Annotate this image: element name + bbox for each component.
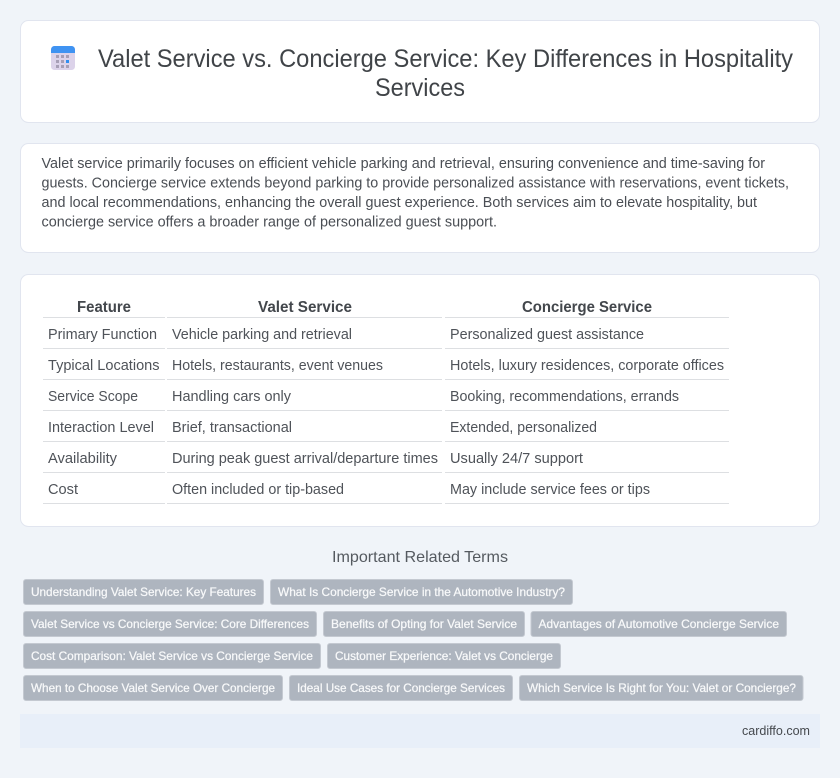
panel: related term tags <box>24 580 803 700</box>
panel: introduction text: concierge service offers a broader range of personalized guest support. <box>42 214 497 230</box>
title <box>98 45 793 102</box>
footer <box>20 714 820 748</box>
tag row 4: Ideal Use Cases for Concierge Services <box>297 681 505 695</box>
panel: header <box>20 20 820 122</box>
row: interaction level <box>43 420 729 442</box>
row: typical locations: Hotels, restaurants, event venues <box>172 358 383 374</box>
tag row 4: When to Choose Valet Service Over Concierge <box>31 681 275 695</box>
tag row 2: Advantages of Automotive Concierge Service <box>538 617 779 631</box>
tag row 1: What Is Concierge Service in the Automotive Industry? <box>278 585 565 599</box>
row: cost: Often included or tip-based <box>172 482 344 498</box>
row: interaction level: Interaction Level <box>48 420 154 436</box>
heading: important related terms: Important Related Terms <box>332 549 508 566</box>
title: Valet Service vs. Concierge Service: Key Differences in Hospitality <box>98 45 793 73</box>
row: primary function: Personalized guest assistance <box>450 327 644 343</box>
row: cost: Cost <box>48 482 78 498</box>
row: cost <box>43 482 729 504</box>
row: availability <box>43 451 729 472</box>
tag row 2: Valet Service vs Concierge Service: Core Differences <box>31 617 309 631</box>
row: typical locations <box>43 358 729 380</box>
row: primary function: Primary Function <box>48 327 157 343</box>
table header row: Feature <box>77 299 131 316</box>
row: service scope: Handling cars only <box>172 389 292 405</box>
row: cost: May include service fees or tips <box>450 482 650 498</box>
table header row <box>43 299 729 318</box>
tag row 3 <box>24 644 560 668</box>
panel: introduction text: Valet service primarily focuses on efficient vehicle parking and retrieval, ensuring convenience and time-saving for <box>42 156 765 172</box>
icon: calendar <box>51 46 75 70</box>
row: interaction level: Extended, personalized <box>450 420 597 436</box>
row: availability: Availability <box>48 451 118 467</box>
tag row 3: Customer Experience: Valet vs Concierge <box>335 649 553 663</box>
row: service scope: Service Scope <box>48 389 138 405</box>
row: primary function <box>43 327 729 348</box>
panel: introduction text: and local recommendations, enhancing the overall guest experience. Both services aim to elevate hospitality, but <box>42 195 757 211</box>
row: service scope <box>43 389 729 410</box>
row: typical locations: Typical Locations <box>48 358 160 374</box>
table header row: Concierge Service <box>522 299 652 316</box>
row: typical locations: Hotels, luxury residences, corporate offices <box>450 358 724 374</box>
panel: comparison table <box>20 274 820 526</box>
row: service scope: Booking, recommendations, errands <box>450 389 679 405</box>
row: availability: Usually 24/7 support <box>450 451 583 467</box>
tag row 1: Understanding Valet Service: Key Features <box>31 585 256 599</box>
tag row 2: Benefits of Opting for Valet Service <box>331 617 517 631</box>
tag row 3: Cost Comparison: Valet Service vs Concierge Service <box>31 649 313 663</box>
table header row: Valet Service <box>258 299 352 316</box>
tag row 4: Which Service Is Right for You: Valet or Concierge? <box>527 681 796 695</box>
panel: introduction text <box>20 144 820 252</box>
row: availability: During peak guest arrival/departure times <box>172 451 438 467</box>
tag row 1 <box>24 580 572 604</box>
row: primary function: Vehicle parking and retrieval <box>172 327 352 343</box>
tag row 2 <box>24 612 786 636</box>
footer: cardiffo.com <box>742 723 810 738</box>
tag row 4 <box>24 676 803 700</box>
title: Services <box>375 74 465 102</box>
panel: introduction text: guests. Concierge service extends beyond parking to provide personalized assistance with reservations, event tickets, <box>42 176 789 192</box>
row: interaction level: Brief, transactional <box>172 420 292 436</box>
